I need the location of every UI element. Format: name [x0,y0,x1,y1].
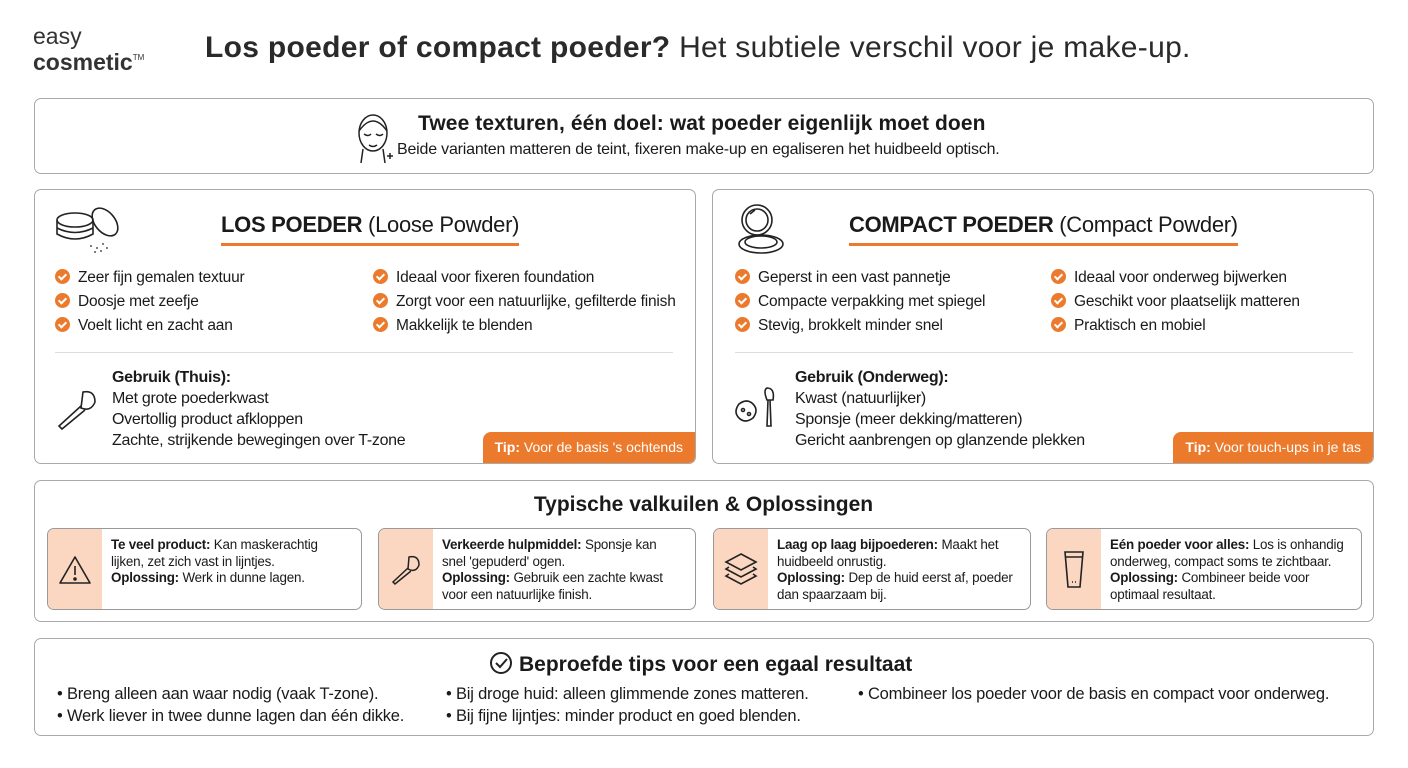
features left [735,269,985,334]
card 3: dan spaarzaam bij. [777,586,887,602]
card 1: Te veel product: Kan maskerachtig [111,537,318,552]
panel: loose powder [34,189,696,464]
intro heading: Twee texturen, één doel: wat poeder eigenlijk moet doen [418,112,986,135]
features right: Makkelijk te blenden [396,317,532,334]
usage text: Kwast (natuurlijker) [795,390,926,407]
heading: tips: Beproefde tips voor een egaal resultaat [519,653,912,676]
features right: Geschikt voor plaatselijk matteren [1074,293,1300,310]
features left: Compacte verpakking met spiegel [758,293,985,310]
tip [483,432,695,463]
card 1 [47,528,362,610]
card 3 [713,528,1031,610]
usage text [795,369,1085,449]
features left: Geperst in een vast pannetje [758,269,951,286]
card 3: Laag op laag bijpoederen: Maakt het [777,537,998,552]
intro text: Beide varianten matteren de teint, fixeren make-up en egaliseren het huidbeeld optisch. [397,141,1000,158]
tips column 1 [57,685,404,725]
card 2 [378,528,696,610]
card 4: optimaal resultaat. [1110,586,1216,602]
icon: sponge and brush [735,387,774,427]
card 1: Oplossing: Werk in dunne lagen. [111,570,305,585]
usage text: Overtollig product afkloppen [112,411,303,428]
logo [33,23,144,75]
features right [1051,269,1300,334]
tip [1173,432,1373,463]
icon: brush [58,390,96,430]
icon: brush [392,556,420,585]
usage text: Gebruik (Thuis): [112,369,231,386]
tips column 1: • Werk liever in twee dunne lagen dan één dikke. [57,707,404,725]
tip: Tip: Voor touch-ups in je tas [1185,439,1361,455]
icon: powder jar [56,207,119,253]
tip: Tip: Voor de basis 's ochtends [495,439,683,455]
features left: Stevig, brokkelt minder snel [758,317,943,334]
card 4: Eén poeder voor alles: Los is onhandig [1110,537,1344,552]
card 2: Verkeerde hulpmiddel: Sponsje kan [442,537,656,552]
usage text: Gebruik (Onderweg): [795,369,948,386]
icon: tube [1064,551,1084,588]
features right: Praktisch en mobiel [1074,317,1205,334]
heading: compact poeder: COMPACT POEDER (Compact Powder) [849,212,1238,237]
logo: easy [33,23,82,49]
panel: pitfalls [34,480,1374,622]
card 3: Oplossing: Dep de huid eerst af, poeder [777,570,1013,585]
card 2: snel 'gepuderd' ogen. [442,554,565,568]
card 3: huidbeeld onrustig. [777,554,886,568]
features right: Ideaal voor fixeren foundation [396,269,594,286]
usage text: Sponsje (meer dekking/matteren) [795,411,1022,428]
features left: Voelt licht en zacht aan [78,317,233,334]
card 4 [1046,528,1362,610]
heading: pitfalls: Typische valkuilen & Oplossingen [534,493,873,516]
panel: compact powder [712,189,1374,464]
heading: los poeder: LOS POEDER (Loose Powder) [221,212,519,237]
title: Los poeder of compact poeder? Het subtiele verschil voor je make-up. [205,31,1191,64]
features right: Zorgt voor een natuurlijke, gefilterde finish [396,293,676,310]
icon: layers [724,553,758,585]
icon: compact [738,204,784,254]
tips column 3: • Combineer los poeder voor de basis en compact voor onderweg. [858,685,1329,703]
tips column 1: • Breng alleen aan waar nodig (vaak T-zone). [57,685,378,703]
tips column 2: • Bij droge huid: alleen glimmende zones matteren. [446,685,809,703]
features left [55,269,244,334]
icon: face [358,114,393,164]
intro panel [34,98,1374,174]
card 1: lijken, zet zich vast in lijntjes. [111,554,275,568]
card 4: onderweg, compact soms te zichtbaar. [1110,554,1331,568]
usage text: Zachte, strijkende bewegingen over T-zone [112,432,405,449]
features left: Zeer fijn gemalen textuur [78,269,244,286]
card 2: Oplossing: Gebruik een zachte kwast [442,570,663,585]
features right: Ideaal voor onderweg bijwerken [1074,269,1287,286]
usage text: Met grote poederkwast [112,390,268,407]
tips column 2 [446,685,809,725]
usage text [112,369,405,449]
card 2: voor een natuurlijke finish. [442,586,592,602]
tips column 2: • Bij fijne lijntjes: minder product en goed blenden. [446,707,801,725]
panel: tips [34,638,1374,736]
card 4: Oplossing: Combineer beide voor [1110,570,1309,585]
features left: Doosje met zeefje [78,293,199,310]
logo: cosmeticTM [33,49,144,75]
icon: warning [59,556,91,584]
features right [373,269,676,334]
usage text: Gericht aanbrengen op glanzende plekken [795,432,1085,449]
